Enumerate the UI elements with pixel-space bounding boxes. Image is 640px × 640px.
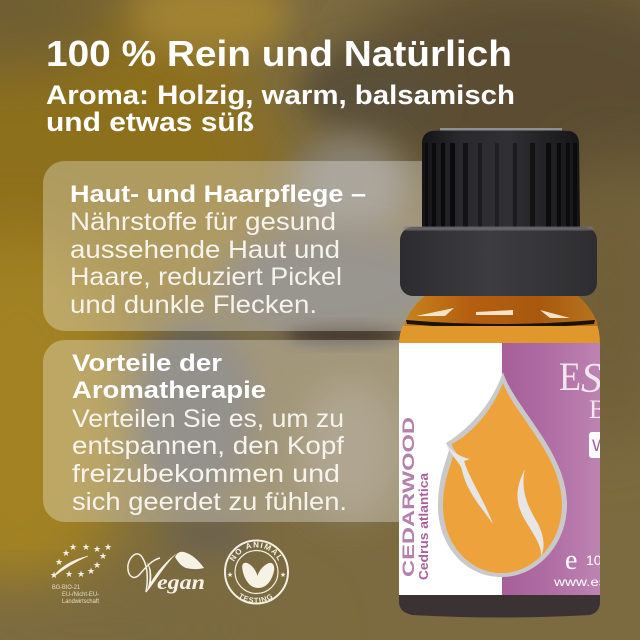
panel body text: entspannen, den Kopf [72,432,344,460]
panel body text: Haare, reduziert Pickel [70,263,342,291]
panel body text: aussehende Haut und [70,236,340,264]
rabbit [242,563,274,588]
panel heading: Aromatherapie [72,377,266,404]
icon: Vegan logo [128,552,205,594]
panel body text: und dunkle Flecken. [70,291,317,319]
bottle body [399,326,614,620]
icon: no animal testing badge: NO ANIMAL [230,542,282,562]
icon: no animal testing badge: TESTING [240,593,272,602]
panel body text: sich geerdet zu fühlen. [72,488,347,516]
subtitle: aroma [46,80,515,137]
subtitle: aroma: Aroma: Holzig, warm, balsamisch [46,80,515,110]
icon: EU organic leaf logo: EU-/Nicht-EU- [62,592,99,598]
label brand text: E [559,354,581,399]
label volume: e [565,545,577,576]
label volume: www.ess [553,577,614,589]
label brand text: B [589,395,606,424]
panel body text: freizubekommen und [72,460,340,488]
label latin name: Cedrus atlantica [416,472,431,580]
oil drop [438,372,567,577]
icon: EU organic leaf logo: BG-BIO-21 [52,585,81,591]
icon: EU organic leaf logo: Landwirtschaft [62,599,99,605]
icon: EU organic leaf logo: ★ [69,543,77,553]
icon: EU organic leaf logo: ★ [87,567,95,577]
icon: EU organic leaf logo: ★ [50,571,58,581]
icon: EU organic leaf logo: ★ [93,561,101,571]
icon: EU organic leaf logo: ★ [77,570,85,580]
cap [422,128,580,227]
icon: EU organic leaf logo: ★ [55,558,63,568]
icon: no animal testing badge [224,540,289,604]
product bottle [399,128,614,620]
feather [175,552,204,569]
panel: Haut- und Haarpflege [43,161,443,331]
panel body text: Verteilen Sie es, um zu [72,405,344,433]
label volume [554,556,600,586]
label variety tag: W [592,436,608,455]
label brand text: S [581,356,602,402]
icon: EU organic leaf logo: ★ [104,543,112,553]
bottle shoulders [399,296,600,340]
title: 100 % Rein und Natürlich [46,33,512,74]
icon: EU organic leaf logo: ★ [65,570,73,580]
icon: no animal testing badge: ★ [280,571,286,579]
panel heading: Haut- und Haarpflege – [70,181,366,208]
panel body text: Nährstoffe für gesund [70,208,336,236]
panel body text [72,405,347,516]
label brand text [560,364,600,418]
icon: EU organic leaf logo: ★ [99,552,107,562]
vegan lettering: egan [157,570,205,594]
icon: EU organic leaf logo [50,543,112,605]
label variety tag [589,432,600,458]
icon: EU organic leaf logo: ★ [62,549,70,559]
panel body text [70,208,342,319]
collar [400,227,597,296]
label product name: CEDARWOOD [399,417,418,577]
label volume: 10 [586,552,602,568]
panel: Vorteile der Aromatherapie [43,340,443,522]
icon: EU organic leaf logo: ★ [82,543,90,553]
panel heading [72,350,266,404]
icon: EU organic leaf logo: ★ [93,545,101,555]
subtitle: aroma: und etwas süß [46,107,254,137]
panel heading: Vorteile der [72,350,222,377]
icon: no animal testing badge: ★ [227,571,233,579]
